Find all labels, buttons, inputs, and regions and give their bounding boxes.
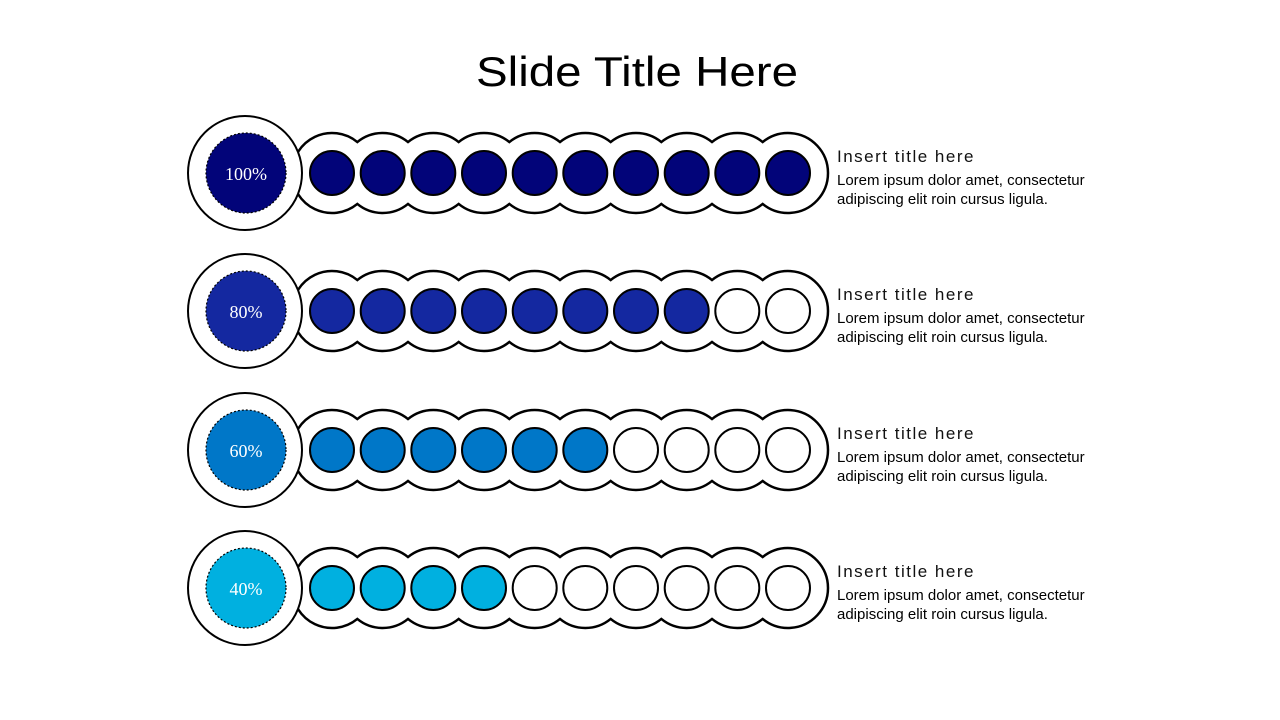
chain outline [292,548,828,628]
row 4: 40% [188,531,1085,645]
text block [837,424,1085,485]
progress dots [310,151,810,195]
text block: Lorem ipsum dolor amet, consectetur [837,310,1085,327]
progress dots [310,289,810,333]
text block: adipiscing elit roin cursus ligula. [837,329,1048,346]
title: Slide Title Here [476,48,798,95]
text block: Insert title here [837,562,975,581]
text block: Insert title here [837,147,975,166]
progress dots [310,566,810,610]
percentage badge [188,393,302,507]
text block: Lorem ipsum dolor amet, consectetur [837,587,1085,604]
text block: Lorem ipsum dolor amet, consectetur [837,172,1085,189]
row 3: 60% [188,393,1085,507]
chain outline [292,271,828,351]
text block: adipiscing elit roin cursus ligula. [837,606,1048,623]
percentage badge [188,254,302,368]
percentage badge: 100% [225,164,267,184]
text block: Insert title here [837,424,975,443]
chain outline [292,410,828,490]
row 1: 100% [188,116,1085,230]
percentage badge: 60% [230,441,262,461]
text block: adipiscing elit roin cursus ligula. [837,468,1048,485]
text block: Lorem ipsum dolor amet, consectetur [837,449,1085,466]
text block: Insert title here [837,285,975,304]
chain outline [292,133,828,213]
text block [837,285,1085,346]
text block [837,147,1085,208]
progress dots [310,428,810,472]
row 2: 80% [188,254,1085,368]
percentage badge [188,531,302,645]
text block: adipiscing elit roin cursus ligula. [837,191,1048,208]
percentage badge: 80% [230,302,262,322]
text block [837,562,1085,623]
percentage badge: 40% [230,579,262,599]
percentage badge [188,116,302,230]
